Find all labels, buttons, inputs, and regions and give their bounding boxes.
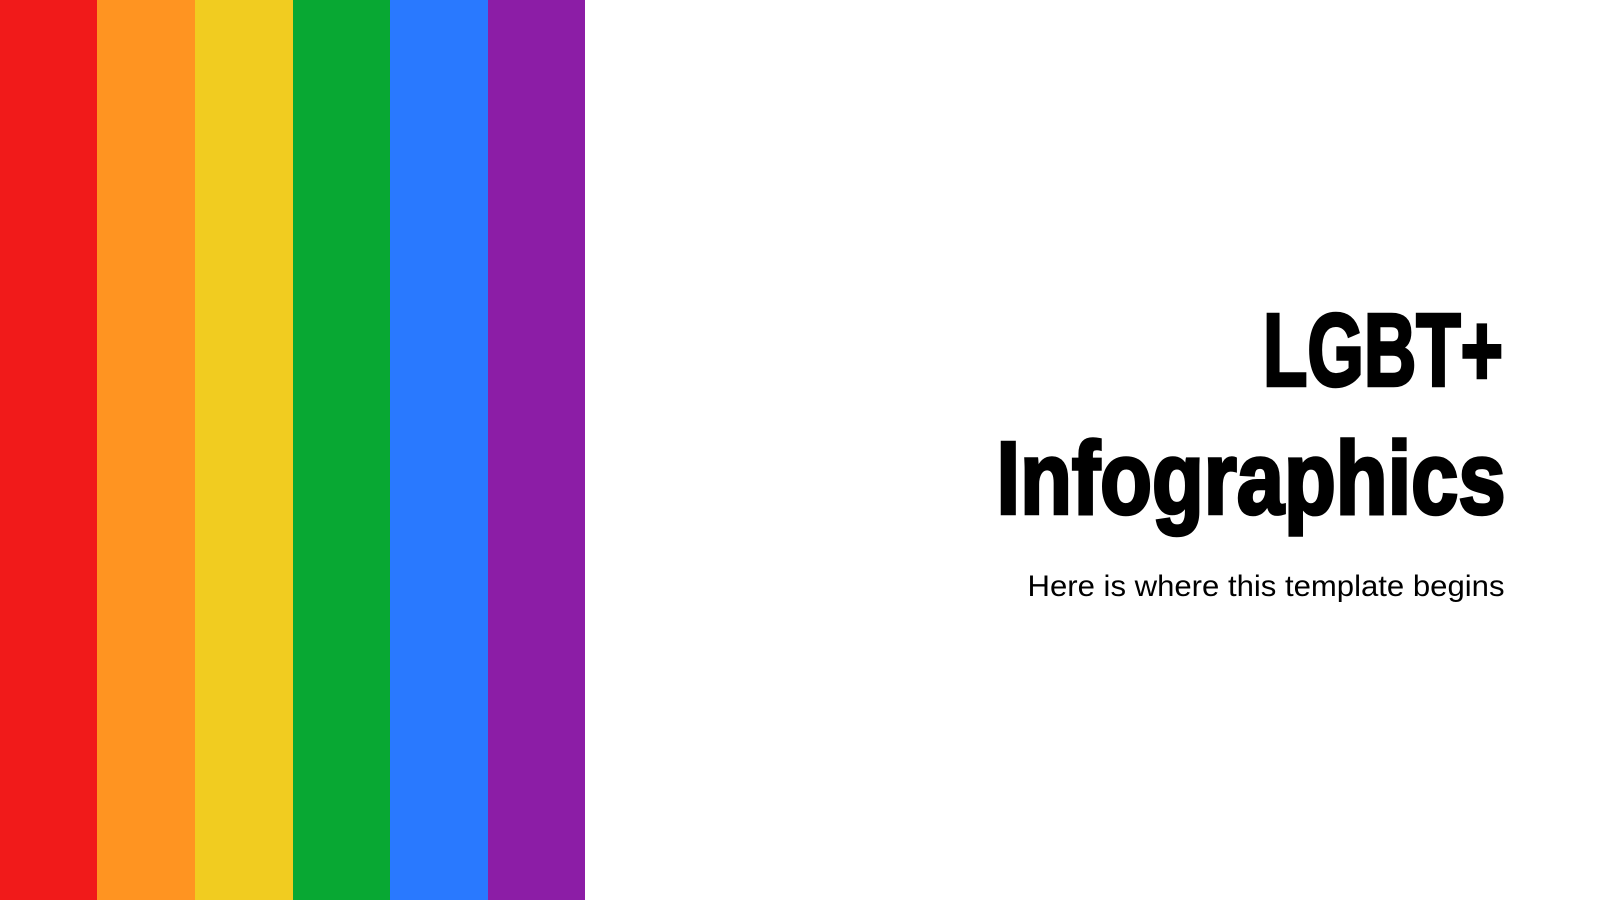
stripe: purple [488, 0, 585, 900]
stripe: blue [390, 0, 488, 900]
title line: LGBT+: LGBT+ [1263, 292, 1503, 408]
stripe: green [292, 0, 390, 900]
stripe: orange [97, 0, 195, 900]
title line: Infographics: Infographics [996, 420, 1506, 536]
title [996, 292, 1506, 536]
stripe: red [0, 0, 97, 900]
stripe: yellow [195, 0, 292, 900]
subtitle: Here is where this template begins [1028, 570, 1504, 603]
rainbow flag stripes [0, 0, 585, 900]
